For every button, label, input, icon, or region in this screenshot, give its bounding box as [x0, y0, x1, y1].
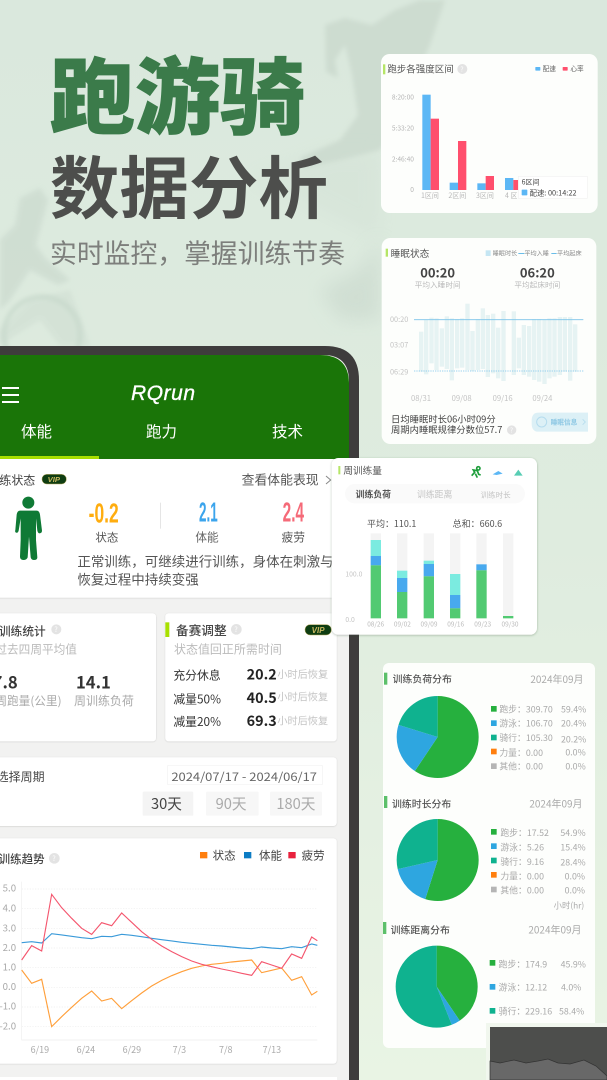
legend: 28.4%	[560, 856, 586, 869]
tabs: 训练距离	[417, 487, 452, 500]
sleep summary: 日均睡眠时长06小时09分	[391, 411, 496, 425]
tabs: 训练负荷	[356, 487, 391, 500]
legend: 其他：0.00	[499, 759, 543, 772]
y axis	[390, 314, 408, 377]
metric: state: -0.2	[89, 497, 119, 528]
panel: training distance distribution: 训练距离分布	[391, 923, 450, 937]
x axis: 08/26	[367, 618, 385, 628]
y axis labels	[0, 881, 16, 1032]
legend: 58.4%	[559, 1005, 584, 1018]
panel: race preparation: ?	[234, 625, 238, 635]
x axis: 4 区	[505, 191, 517, 201]
x axis labels: 7/3	[173, 1043, 186, 1056]
y axis labels: 4.0	[3, 901, 16, 915]
summary: 平均：110.1	[367, 517, 416, 530]
panel: select period: 2024/07/17 - 2024/06/17	[171, 768, 317, 785]
VIP badge	[305, 625, 331, 635]
metric: fitness: 2.1	[199, 497, 218, 528]
sleep time stats	[415, 263, 560, 290]
y axis: 5:33:20	[392, 122, 414, 132]
y axis labels: 2.0	[3, 940, 16, 954]
y axis: 0.0	[345, 614, 355, 624]
sleep summary: 周期内睡眠规律分数位57.7	[391, 422, 502, 436]
status description: 正常训练，可继续进行训练，身体在刺激与	[77, 551, 334, 571]
x axis: 09/08	[452, 393, 472, 404]
tabs: 跑力	[146, 420, 177, 442]
panel: training status: 练状态	[0, 471, 35, 488]
subtitle: 实时监控，掌握训练节奏	[50, 232, 345, 271]
panel: training stats: 14.1	[76, 670, 111, 694]
tabs: 体能	[21, 420, 52, 442]
legend	[491, 826, 586, 911]
pie chart	[417, 716, 458, 757]
y axis labels: 5.0	[3, 881, 16, 895]
panel: race preparation: 充分休息	[173, 666, 221, 683]
x axis: 1区间	[421, 191, 439, 201]
sleep time stats: 平均起床时间	[514, 279, 560, 290]
panel: training duration distribution: 2024年09月	[529, 795, 583, 810]
legend: 配速	[543, 63, 556, 73]
legend: 54.9%	[560, 826, 586, 839]
legend: 0.0%	[565, 883, 585, 896]
panel: training load distribution: 2024年09月	[530, 671, 584, 686]
y axis	[392, 92, 414, 194]
tooltip: 6区间	[522, 177, 540, 187]
legend: 跑步：17.52	[500, 826, 549, 839]
tooltip: 配速: 00:14:22	[530, 187, 576, 198]
panel: training stats	[0, 613, 156, 741]
panel: weekly training volume: 周训练量	[343, 463, 382, 477]
panel: training load distribution	[384, 671, 586, 772]
legend: 跑步：174.9	[499, 958, 547, 971]
period buttons	[143, 792, 322, 816]
legend	[491, 703, 586, 772]
x axis: 09/16	[447, 618, 465, 628]
sleep time stats: 平均入睡时间	[415, 279, 461, 290]
legend: 游泳：5.26	[500, 840, 544, 853]
app logo: RQrun	[131, 382, 195, 405]
x axis: 09/02	[394, 618, 411, 628]
sleep info button: 睡眠信息	[551, 416, 578, 426]
x axis: 2区间	[448, 191, 466, 201]
legend: 心率	[570, 63, 584, 73]
menu icon	[2, 387, 19, 403]
legend: 睡眠时长	[493, 249, 517, 258]
panel: race preparation: 小时后恢复	[277, 713, 328, 728]
metric: state	[89, 497, 119, 546]
tabs	[0, 420, 303, 459]
icon: body figure	[15, 497, 42, 560]
x axis labels: 7/8	[219, 1043, 233, 1056]
VIP badge: VIP	[312, 626, 325, 635]
x axis: 09/16	[493, 393, 513, 404]
sleep bars	[419, 304, 577, 384]
legend: 小时(hr)	[554, 899, 584, 911]
panel: distribution charts background	[383, 663, 595, 1048]
panel: race preparation: 20.2	[247, 664, 277, 685]
panel: race preparation: 小时后恢复	[277, 666, 328, 681]
legend: 20.2%	[561, 732, 586, 745]
panel: race preparation: 小时后恢复	[277, 688, 328, 703]
pie chart	[417, 839, 458, 880]
legend: 疲劳	[302, 848, 325, 864]
x axis: 08/31	[411, 393, 431, 404]
legend: 20.4%	[561, 717, 586, 730]
y axis: 03:07	[390, 340, 408, 351]
x axis	[421, 191, 517, 201]
legend	[200, 848, 325, 864]
y axis: 06:29	[390, 366, 408, 377]
period buttons: 30天	[151, 793, 182, 814]
phone mockup	[0, 346, 359, 1080]
legend: 骑行：229.16	[499, 1005, 552, 1018]
x axis labels: 6/19	[31, 1043, 49, 1056]
sport icons	[472, 467, 523, 478]
status description	[77, 551, 334, 588]
title: secondary heading: 数据分析	[50, 134, 328, 233]
panel: training distance distribution	[383, 922, 586, 1018]
panel: training trend chart: ?	[52, 854, 56, 864]
legend: 游泳：106.70	[499, 717, 553, 730]
title: main heading: 跑游骑	[50, 31, 305, 151]
y axis: 2:46:40	[392, 153, 414, 163]
panel: running intensity zones: 跑步各强度区间	[387, 61, 454, 75]
background athlete silhouettes	[0, 0, 445, 346]
y axis labels: 3.0	[3, 920, 16, 934]
x axis: 09/24	[532, 393, 552, 404]
metric: fatigue: 疲劳	[282, 529, 305, 546]
sleep time stats: 06:20	[520, 263, 555, 282]
metric: fatigue: 2.4	[283, 497, 304, 528]
VIP badge	[42, 474, 66, 484]
panel: training duration distribution: 训练时长分布	[392, 796, 451, 810]
legend: 骑行：9.16	[500, 855, 544, 868]
legend	[486, 249, 582, 258]
tabs	[345, 484, 525, 503]
panel: training status: 查看体能表现	[242, 469, 319, 488]
panel: race preparation: 减量20%	[173, 713, 221, 730]
panel: race preparation	[165, 613, 337, 741]
y axis: 00:20	[390, 314, 408, 325]
x axis: 3区间	[476, 191, 494, 201]
x axis labels	[31, 1043, 281, 1056]
line: state	[22, 960, 317, 1027]
tooltip	[518, 176, 587, 198]
legend: 45.9%	[561, 958, 586, 971]
panel: running intensity zones: ?	[460, 64, 463, 74]
stacked bars	[371, 540, 460, 595]
panel: sleep status: 睡眠状态	[391, 246, 430, 260]
legend: 体能	[259, 848, 282, 864]
bars	[422, 95, 513, 190]
legend: 其他：0.00	[500, 883, 544, 896]
background bicycle wheel	[4, 297, 80, 373]
metric: fatigue	[282, 497, 305, 546]
period buttons: 180天	[276, 793, 316, 814]
legend: 平均起床	[557, 249, 582, 258]
y axis labels: 0.0	[3, 979, 16, 993]
legend: 0.0%	[565, 745, 586, 758]
legend: 0.0%	[565, 869, 585, 882]
legend: 跑步：309.70	[499, 703, 553, 716]
panel: training duration distribution	[384, 795, 586, 911]
panel: race preparation: 减量50%	[173, 690, 221, 707]
panel: training trend chart	[0, 838, 337, 1064]
legend: 15.4%	[560, 840, 586, 853]
sleep time stats: 00:20	[420, 263, 455, 282]
panel: weekly training volume	[332, 458, 537, 635]
panel: training stats: ?	[54, 625, 58, 635]
summary: 总和：660.6	[453, 517, 502, 530]
panel: training distance distribution: 2024年09月	[528, 922, 582, 937]
y axis labels: 1.0	[3, 959, 16, 973]
average lines	[414, 318, 583, 321]
legend: 状态	[213, 848, 236, 864]
panel: training trend chart: 训练趋势	[0, 851, 45, 867]
legend: 59.4%	[561, 703, 586, 716]
x axis: 09/09	[421, 618, 438, 628]
x axis labels: 6/24	[77, 1043, 95, 1056]
panel: sleep status	[382, 238, 596, 444]
legend: 游泳：12.12	[499, 981, 547, 994]
y axis: 0	[410, 184, 414, 194]
legend: 力量：0.00	[500, 869, 544, 882]
x axis	[411, 393, 552, 404]
legend	[490, 958, 586, 1018]
tabs: 技术	[272, 420, 303, 442]
y axis	[345, 569, 363, 624]
status description: 恢复过程中持续变强	[77, 568, 199, 588]
metric: state: 状态	[95, 530, 118, 546]
sleep info button	[532, 413, 588, 432]
x axis: 09/23	[474, 618, 492, 628]
app header	[0, 355, 349, 459]
legend: 4.0%	[561, 981, 581, 994]
panel: training stats: 训练统计	[0, 622, 46, 639]
x axis	[367, 618, 519, 628]
panel: select period	[0, 757, 337, 826]
line: fatigue	[22, 894, 317, 975]
y axis: 100.0	[345, 569, 363, 579]
panel: sleep status: ?	[510, 425, 513, 434]
panel: running intensity zones	[381, 54, 598, 213]
tabs: 训练时长	[481, 489, 511, 500]
panel: race preparation: 状态值回正所需时间	[174, 641, 282, 658]
VIP badge: VIP	[48, 475, 61, 484]
summary	[367, 517, 502, 530]
legend: 0.0%	[565, 759, 586, 772]
x axis labels: 7/13	[263, 1043, 281, 1056]
legend: 力量：0.00	[499, 746, 543, 759]
corner dark image fragment	[486, 1023, 607, 1080]
panel: race preparation: 69.3	[247, 710, 277, 731]
panel: training load distribution: 训练负荷分布	[393, 671, 452, 685]
panel: training stats: 周训练负荷	[74, 692, 134, 709]
x axis: 09/30	[502, 618, 519, 628]
y axis: 8:20:00	[392, 92, 414, 102]
period buttons: 90天	[216, 793, 247, 814]
sleep summary	[391, 411, 502, 436]
legend	[535, 63, 584, 73]
pie chart	[416, 966, 457, 1007]
panel: training status	[0, 459, 334, 598]
grid	[22, 889, 317, 1027]
metric: fitness: 体能	[195, 529, 219, 546]
legend: 骑行：105.30	[499, 731, 553, 744]
legend: 平均入睡	[524, 249, 549, 258]
panel: race preparation: 40.5	[247, 687, 277, 708]
line: fitness	[22, 934, 317, 949]
tracks	[371, 533, 513, 618]
next card stub	[0, 1077, 337, 1080]
metric: fitness	[195, 497, 219, 546]
x axis labels: 6/29	[123, 1043, 141, 1056]
panel: race preparation: 备赛调整	[176, 620, 227, 639]
